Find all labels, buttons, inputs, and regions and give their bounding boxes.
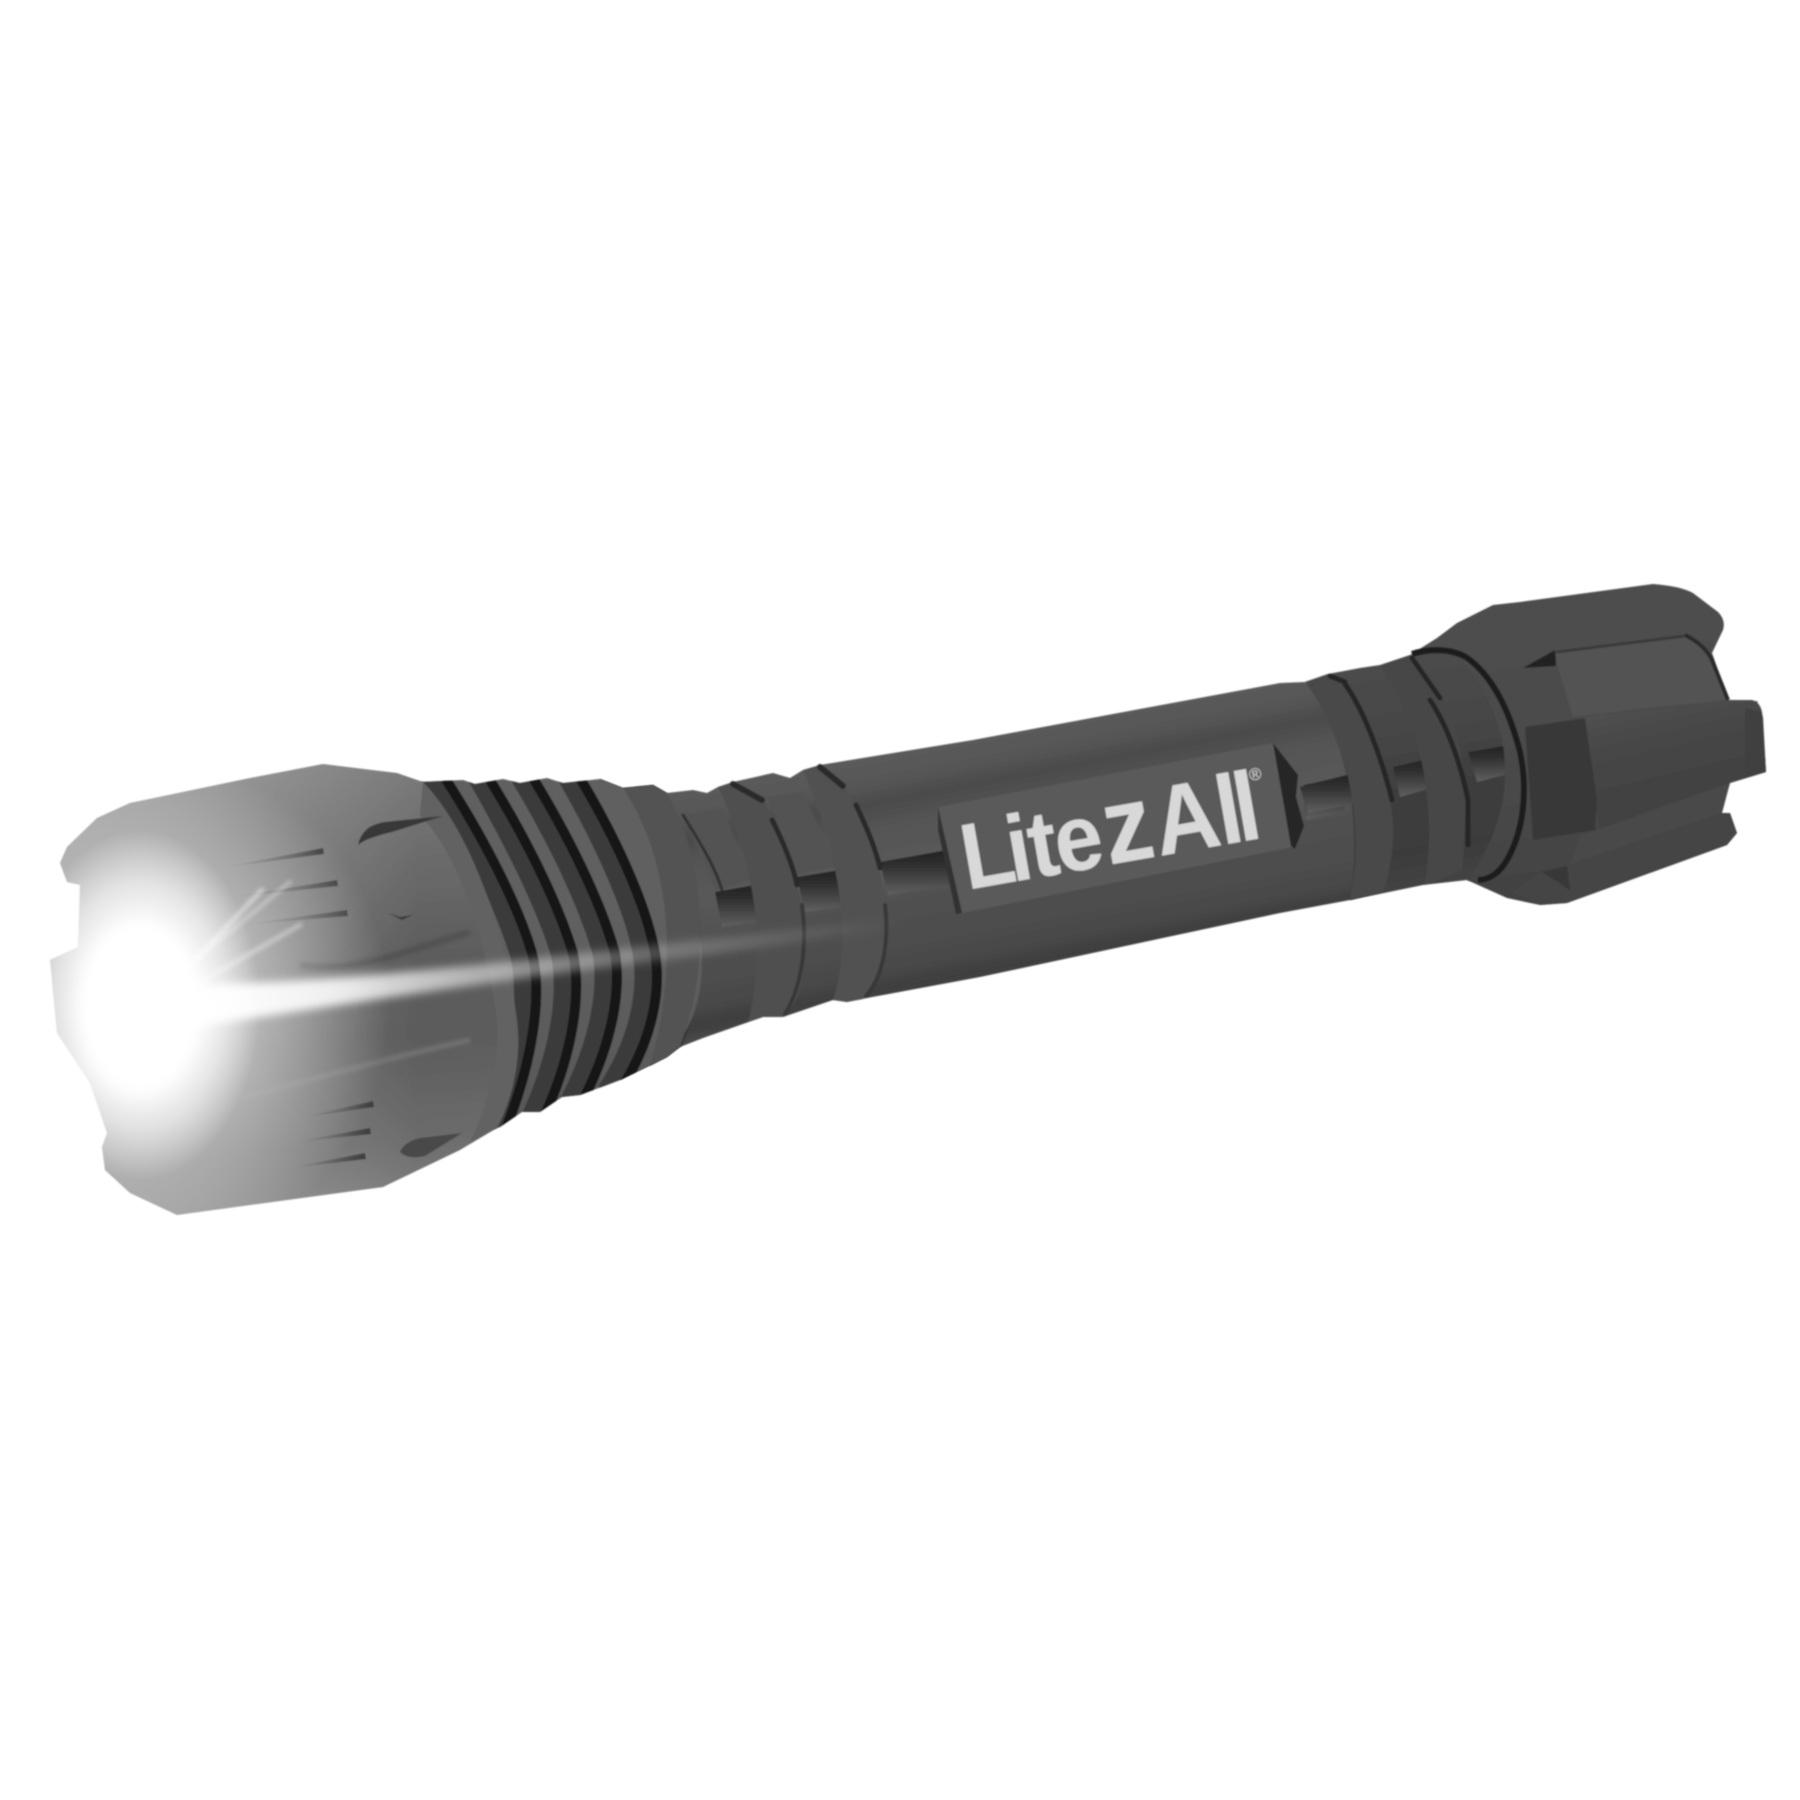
head creases bbox=[240, 932, 470, 1098]
flashlight body bbox=[600, 682, 1390, 1080]
product illustration: flashlight bbox=[50, 583, 1768, 1216]
light beam bbox=[0, 770, 900, 1240]
logo left edge shadow bbox=[938, 807, 962, 914]
grip marks bbox=[220, 848, 374, 1168]
cooling fins bbox=[420, 775, 702, 1140]
neck upper flats bbox=[683, 792, 838, 890]
logo panel bbox=[938, 741, 1304, 914]
neck bands bbox=[655, 765, 888, 1045]
fin black grooves bbox=[445, 778, 657, 1138]
star rays bbox=[180, 882, 300, 985]
chip bbox=[388, 913, 413, 920]
collar dark panel bbox=[1525, 718, 1597, 840]
lens head bbox=[50, 764, 518, 1215]
horizontal streak bbox=[170, 918, 900, 1030]
wide haze bbox=[0, 770, 390, 1240]
notch right of logo bbox=[1304, 779, 1345, 820]
tube and neck silhouette bbox=[600, 682, 1390, 1080]
tail flat windows bbox=[1300, 745, 1513, 813]
fin grooves bbox=[430, 775, 657, 1140]
tail cap bbox=[1410, 584, 1766, 905]
logo notch bbox=[1273, 743, 1304, 849]
head haze bbox=[50, 764, 518, 1215]
tail metal section bbox=[1300, 640, 1513, 900]
fin groove shading bbox=[430, 775, 645, 1140]
centre rib bbox=[1582, 701, 1766, 830]
neck collar behind fins bbox=[623, 785, 700, 1066]
top notch bbox=[358, 816, 443, 845]
bottom notch bbox=[400, 1133, 462, 1157]
centre rib end shade bbox=[1745, 708, 1766, 778]
black collar ring bbox=[1412, 650, 1524, 880]
upper face dark rim bbox=[1685, 635, 1728, 700]
lens glow bbox=[20, 830, 260, 1180]
lower face bbox=[1570, 783, 1730, 866]
bottom rib bbox=[1512, 813, 1737, 905]
head rim band bbox=[420, 782, 518, 1142]
upper face bbox=[1555, 635, 1728, 717]
top wedge bbox=[1523, 650, 1556, 668]
registered mark: ® bbox=[1247, 764, 1263, 785]
neck flat windows bbox=[715, 850, 950, 927]
lens hot spot bbox=[82, 925, 198, 1095]
logo text: All bbox=[1144, 750, 1268, 877]
tail rings bbox=[1305, 656, 1468, 900]
logo text: Lite bbox=[952, 782, 1111, 911]
logo text: z bbox=[1092, 760, 1162, 888]
